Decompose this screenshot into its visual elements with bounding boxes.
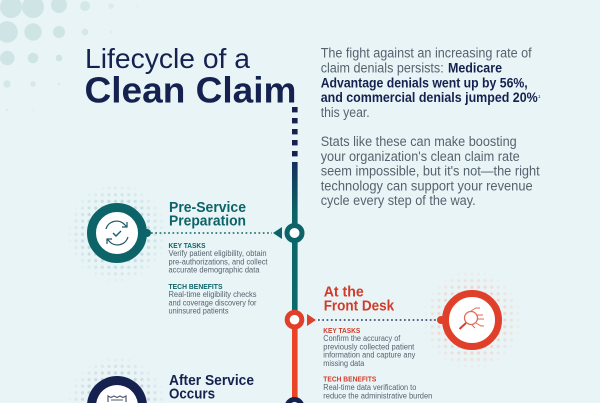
icon: front desk badge	[437, 294, 498, 346]
key tasks: KEY TASKS	[323, 326, 360, 335]
key tasks: information and capture any	[323, 350, 415, 360]
title: Clean Claim	[84, 70, 296, 110]
tech benefits	[323, 375, 432, 400]
timeline line	[292, 107, 298, 400]
icon: pre-service badge	[92, 208, 151, 258]
key tasks: accurate demographic data	[168, 266, 260, 275]
dotted connector	[318, 319, 438, 321]
tech benefits: uninsured patients	[168, 306, 228, 316]
dotted connector	[151, 232, 272, 234]
heading: Preparation	[169, 214, 246, 230]
tech benefits: reduce the administrative burden	[323, 391, 432, 400]
icon: after service badge	[87, 376, 147, 403]
timeline node	[287, 312, 302, 327]
timeline node	[285, 397, 304, 403]
halftone backdrop	[74, 360, 162, 401]
tech benefits: Real-time eligibility checks	[168, 290, 256, 299]
key tasks: pre-authorizations, and collect	[168, 257, 268, 266]
title	[84, 43, 296, 110]
intro text block: claim denials persists:	[321, 60, 444, 75]
arrow	[273, 227, 282, 239]
panel: after service occurs	[74, 360, 304, 403]
intro text block: The fight against an increasing rate of	[321, 46, 532, 61]
heading: Pre-Service	[169, 200, 246, 216]
panel: pre-service preparation	[74, 187, 304, 315]
key tasks	[168, 241, 268, 275]
key tasks: Confirm the accuracy of	[323, 334, 401, 343]
intro text block: Medicare	[448, 60, 502, 75]
intro text block: Stats like these can make boosting	[321, 134, 517, 149]
key tasks: missing data	[323, 359, 365, 368]
title: Lifecycle of a	[85, 43, 251, 74]
heading	[169, 373, 254, 402]
tech benefits: and coverage discovery for	[168, 298, 257, 307]
tech benefits: TECH BENEFITS	[168, 282, 222, 291]
key tasks: KEY TASKS	[168, 241, 206, 250]
intro text block: seem impossible, but it's not—the right	[321, 164, 540, 179]
timeline node	[287, 226, 302, 240]
heading: Occurs	[169, 386, 215, 402]
heading: After Service	[169, 373, 254, 389]
key tasks: previously collected patient	[323, 342, 415, 351]
heading: Front Desk	[324, 299, 395, 315]
key tasks	[323, 326, 415, 368]
heading	[324, 284, 395, 315]
intro text block: this year.	[321, 105, 370, 120]
panel: at the front desk	[284, 274, 518, 398]
background halftone circles	[0, 0, 138, 111]
halftone backdrop	[426, 274, 518, 366]
tech benefits: TECH BENEFITS	[323, 375, 376, 384]
intro text block: your organization's clean claim rate	[321, 149, 520, 164]
intro text block: and commercial denials jumped 20%	[321, 90, 538, 105]
intro text block: Advantage denials went up by 56%,	[321, 75, 528, 90]
tech benefits	[168, 282, 257, 316]
tech benefits: Real-time data verification to	[323, 383, 417, 392]
key tasks: Verify patient eligibility, obtain	[168, 249, 266, 258]
heading	[169, 200, 246, 230]
intro text block: technology can support your revenue	[321, 179, 533, 194]
intro text block	[321, 46, 541, 208]
intro text block: 1	[538, 94, 541, 99]
arrow	[307, 314, 316, 326]
heading: At the	[324, 284, 364, 300]
intro text block: cycle every step of the way.	[321, 193, 476, 208]
halftone backdrop	[74, 187, 163, 276]
